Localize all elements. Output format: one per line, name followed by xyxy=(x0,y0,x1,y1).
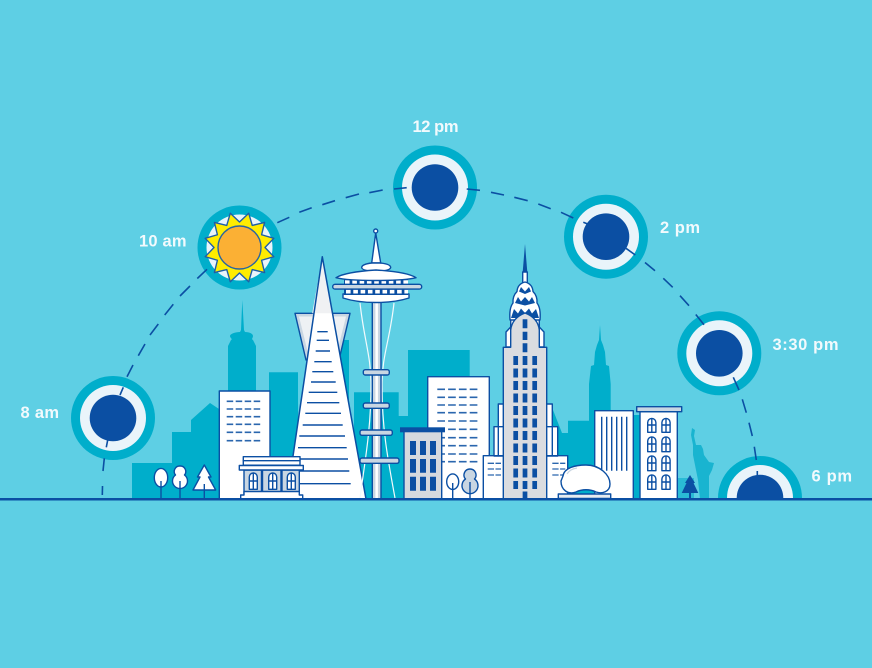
gray block windows xyxy=(410,441,436,491)
window dashes xyxy=(437,389,479,462)
ground line xyxy=(0,498,872,500)
silhouette: block behind navy tree xyxy=(678,478,694,499)
museum base xyxy=(241,492,303,499)
sun marker: 3:30 pm xyxy=(677,311,761,395)
tree: navy pine xyxy=(682,475,698,499)
silhouette: blocks right of Chrysler xyxy=(553,410,597,499)
sun marker: 2 pm xyxy=(564,195,648,279)
museum roof xyxy=(239,457,303,470)
silhouette: Statue of Liberty xyxy=(691,428,714,499)
label: 10 am: 10 am xyxy=(139,233,186,251)
silhouette: block behind pyramid xyxy=(269,340,349,499)
Chrysler shoulders xyxy=(506,318,544,347)
dashed sun path arc xyxy=(102,188,757,495)
skyline silhouettes xyxy=(132,300,714,499)
Chrysler crown xyxy=(510,244,540,320)
museum windows xyxy=(249,473,295,489)
needle shaft xyxy=(372,300,381,499)
needle white legs xyxy=(360,303,395,498)
silhouette: Empire State Building xyxy=(589,325,611,422)
trees beside gray block xyxy=(447,469,478,499)
sun marker: 6 pm, setting xyxy=(710,456,810,544)
building: Transamerica pyramid xyxy=(287,257,366,499)
silhouette: left low-rise blocks xyxy=(132,403,222,499)
building: Cloud Gate bean xyxy=(558,465,611,498)
building: Space Needle xyxy=(333,229,422,499)
building: gray block xyxy=(400,427,445,499)
pyramid wings xyxy=(295,313,350,360)
needle top saucer xyxy=(333,229,422,302)
Chrysler main tower xyxy=(503,313,547,499)
silhouette: strip between buildings xyxy=(632,415,641,499)
museum body xyxy=(244,470,299,495)
window dashes xyxy=(227,401,261,441)
tree: left oval xyxy=(154,468,168,499)
needle rings xyxy=(360,370,399,463)
museum columns xyxy=(262,470,282,495)
sun marker: 12 pm xyxy=(393,146,477,230)
building: white office behind gray block xyxy=(428,377,489,499)
building: small museum xyxy=(239,457,303,499)
building: Chrysler Building xyxy=(483,244,568,499)
label: 2 pm: 2 pm xyxy=(660,219,700,237)
label: 3:30 pm: 3:30 pm xyxy=(772,336,838,354)
Chrysler windows xyxy=(516,319,535,498)
building: left white office xyxy=(219,391,270,499)
sun marker: 8 am xyxy=(71,376,155,460)
building: ribbed tower xyxy=(595,411,633,499)
tree: left double-lobe xyxy=(172,466,188,499)
pyramid floor lines xyxy=(298,332,351,484)
silhouette: blocks behind needle xyxy=(354,350,470,499)
sun marker: 10 am, yellow sun xyxy=(198,206,282,290)
building: arched-window block xyxy=(637,407,682,499)
label: 6 pm: 6 pm xyxy=(812,468,852,486)
label: 12 pm: 12 pm xyxy=(412,118,458,136)
Chrysler lower wings xyxy=(483,404,568,499)
silhouette: One World Trade tower xyxy=(228,300,256,395)
tree: white pine xyxy=(193,465,216,499)
label: 8 am: 8 am xyxy=(20,404,59,422)
pyramid body xyxy=(287,257,366,499)
arched windows xyxy=(648,418,670,489)
